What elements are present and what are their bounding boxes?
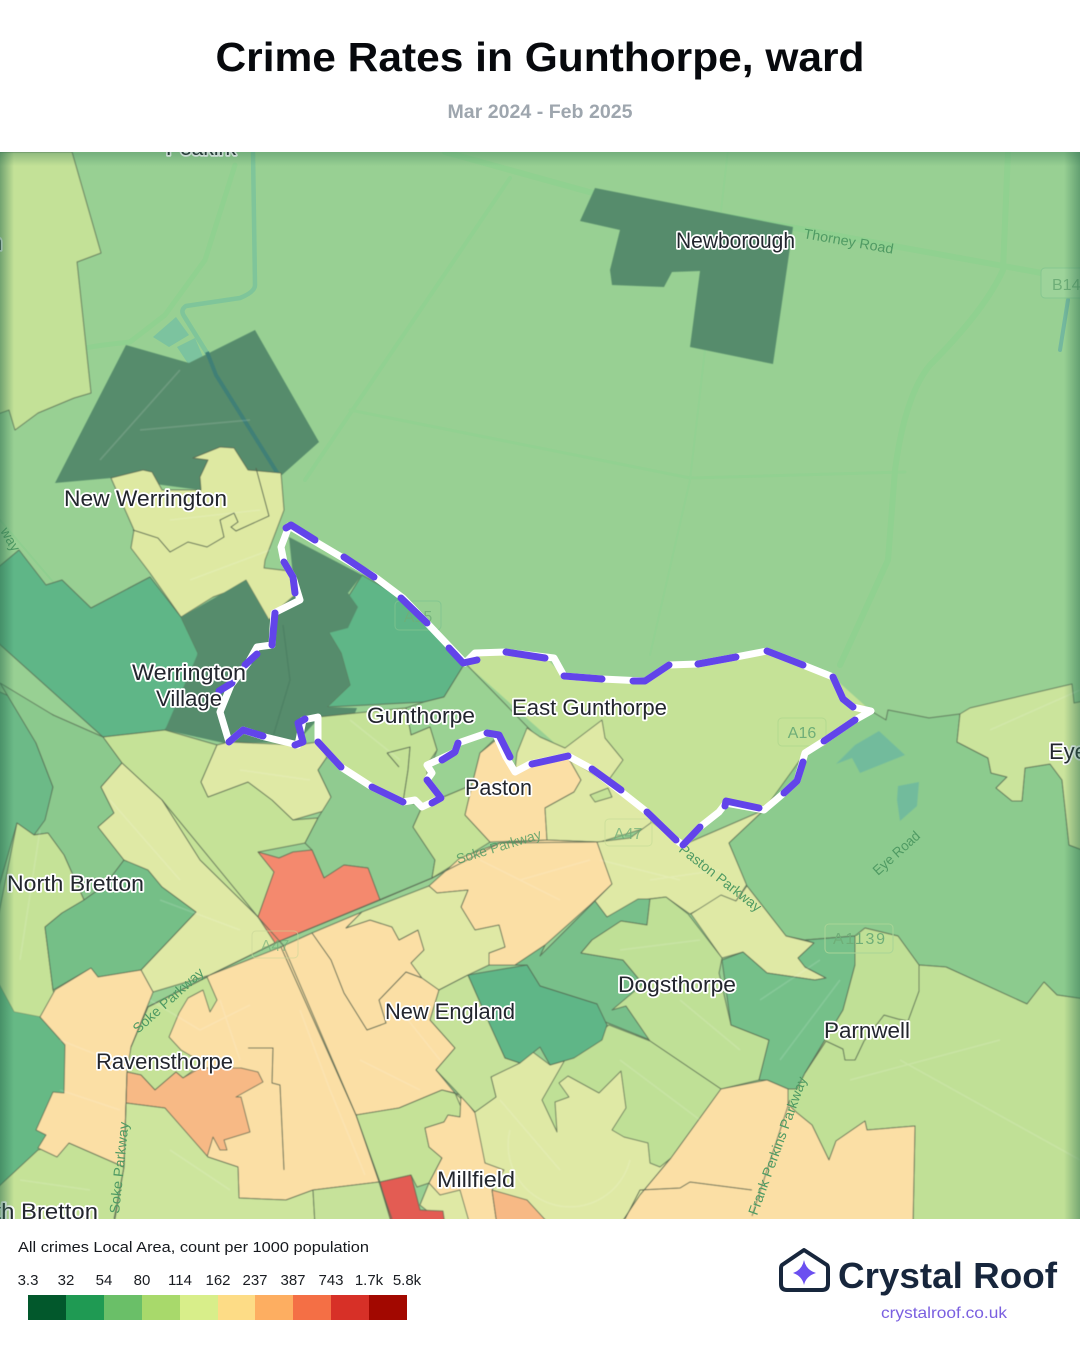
ward: Gunthorpe patch green — [406, 666, 532, 758]
ward: Parnwell light — [805, 928, 919, 1073]
ward: small green patch — [590, 788, 612, 802]
shield: A16 — [778, 718, 826, 746]
ward: green west corridor — [0, 683, 124, 900]
label: North Bretton: North Bretton — [7, 871, 144, 896]
canal over dark ward — [207, 352, 278, 474]
Crystal Roof logo — [781, 1250, 1058, 1322]
road label: Soke Parkway east: Soke Parkway — [454, 826, 543, 867]
shield: A15: A15 — [404, 609, 432, 626]
ward: North Bretton green — [45, 860, 196, 990]
map: ponds — [153, 317, 203, 365]
ward: Soke strip — [127, 977, 217, 1090]
shield: A47 — [605, 819, 652, 846]
ward boundary: Gunthorpe — [219, 525, 871, 845]
ward: pale Parkway north — [595, 810, 764, 917]
ward: corridor green — [103, 730, 318, 917]
ward: Peterborough pale band — [691, 886, 826, 980]
legend scale labels: 743 — [318, 1272, 344, 1289]
title: Crime Rates in Gunthorpe, ward — [216, 34, 864, 80]
ward: Ravensthorpe central peach — [169, 946, 379, 1200]
ward: Paston light lower — [413, 785, 490, 878]
label: New Werrington: New Werrington — [64, 486, 227, 511]
ward: pale New England north — [346, 886, 505, 990]
ward: West teal — [0, 550, 198, 737]
ward: North Bretton — [0, 823, 84, 1017]
shield: A47: A47 — [614, 826, 642, 843]
shield: A16: A16 — [788, 725, 816, 742]
ward: Newborough dark — [580, 188, 793, 364]
subtitle: date range: Mar 2024 - Feb 2025 — [448, 102, 633, 123]
ward: green south of Gunthorpe — [305, 757, 435, 900]
legend scale labels — [18, 1272, 422, 1289]
boundary: white outline — [220, 526, 871, 845]
legend scale labels: 114 — [168, 1272, 192, 1289]
shield: A1139 — [825, 924, 893, 953]
ward: New Werrington dark — [55, 330, 319, 490]
ward: Dogsthorpe main — [581, 897, 769, 1089]
legend — [18, 1239, 422, 1320]
ward: South-east peach — [620, 1080, 915, 1225]
legend scale labels: 3.3 — [18, 1272, 38, 1289]
map: rural roads and water — [12, 152, 1070, 665]
ward: pale south centre — [420, 1040, 721, 1225]
legend scale labels: 237 — [242, 1272, 268, 1289]
road label: Soke Parkway west: Soke Parkway — [129, 964, 207, 1036]
label: Gunthorpe: Gunthorpe — [367, 703, 475, 728]
ward: Paston peach — [465, 740, 581, 842]
boundary: purple dashes — [219, 525, 855, 845]
shield: A47 west: A47 — [261, 938, 289, 955]
legend scale labels: 54 — [96, 1272, 112, 1289]
ward: eastern rural green — [729, 710, 1080, 1004]
ward: north-west light area — [0, 152, 101, 430]
ward: Millfield orange — [492, 1190, 550, 1225]
label: clipped place at top edge: Peakirk — [166, 135, 237, 160]
ward: Rail south green — [356, 1090, 461, 1187]
ward: salmon high-crime — [258, 850, 380, 943]
ward: north-left band — [0, 690, 53, 900]
label: Parnwell: Parnwell — [824, 1018, 910, 1043]
label: Ravensthorpe: Ravensthorpe — [96, 1049, 233, 1074]
shield: B14: B14 — [1052, 277, 1080, 294]
label: Millfield: Millfield — [437, 1167, 515, 1192]
ward: New England peach — [281, 912, 455, 1115]
shield: A15 — [395, 601, 441, 630]
legend scale labels: 5.8k — [393, 1272, 422, 1289]
ward: New England teal — [468, 965, 607, 1065]
logo wordmark: Crystal Roof — [838, 1255, 1058, 1296]
ward: Parnwell band — [722, 936, 855, 1089]
ward: Millfield peach — [425, 1095, 504, 1225]
ward: pale south of Werrington — [201, 742, 331, 820]
ward: East Gunthorpe — [465, 651, 871, 845]
icon: house with star — [781, 1250, 828, 1290]
road label: Frank Perkins Parkway: Frank Perkins Parkway — [745, 1074, 810, 1217]
road label: Paston Parkway: Paston Parkway — [676, 841, 765, 915]
ward: Dogsthorpe teal band — [515, 899, 650, 1040]
ward: SW lower light — [114, 1103, 315, 1225]
map: rail and parkway lines — [114, 800, 790, 1219]
shield: B14 — [1041, 268, 1080, 298]
ward: Dogsthorpe south — [542, 1025, 721, 1167]
legend scale labels: 32 — [58, 1272, 74, 1289]
ward: Soke Parkway peach — [429, 840, 612, 965]
legend scale labels: 1.7k — [355, 1272, 384, 1289]
ward: Gunthorpe south-west — [318, 708, 441, 807]
legend scale labels: 80 — [134, 1272, 150, 1289]
shield: A1139: A1139 — [833, 931, 885, 948]
ward: wedge south — [313, 1182, 392, 1225]
label: Dogsthorpe: Dogsthorpe — [618, 972, 736, 997]
road label: Eye Road: Eye Road — [869, 828, 923, 878]
ward: South-east rural — [788, 965, 1080, 1225]
ward: pale rail corridor — [98, 763, 275, 992]
legend scale labels: 162 — [205, 1272, 231, 1289]
shield: A47 west — [252, 931, 298, 958]
label: Werrington: Werrington — [132, 660, 246, 685]
map: wards — [0, 152, 1080, 1225]
map: faint residential streets — [20, 370, 1080, 1207]
legend scale labels: 387 — [280, 1272, 306, 1289]
ward: East Gunthorpe pale wedge — [515, 720, 623, 785]
label: Newborough: Newborough — [676, 228, 795, 253]
ward: New Werrington light — [111, 447, 295, 620]
ward: SW green — [0, 1143, 124, 1225]
legend colour bar — [28, 1295, 407, 1320]
website url: crystalroof.co.uk — [881, 1305, 1008, 1322]
legend title: All crimes Local Area, count per 1000 population — [18, 1239, 369, 1256]
ward: far-west green — [0, 977, 65, 1190]
ward: Red high-crime — [380, 1175, 445, 1225]
ward: Eye light — [957, 684, 1080, 851]
label: Village: Village — [156, 686, 222, 711]
label: East Gunthorpe: East Gunthorpe — [512, 695, 667, 720]
road label: Soke Parkway south: Soke Parkway — [106, 1121, 132, 1214]
map: edge vignette — [0, 152, 1080, 1219]
ward: Werrington dark — [165, 537, 362, 743]
ward: Gunthorpe teal — [327, 575, 465, 707]
road label: Thorney Road: Thorney Road — [802, 225, 895, 257]
ward: Ravensthorpe orange — [126, 1068, 263, 1157]
label: Paston: Paston — [465, 775, 532, 800]
ward: New England light — [430, 975, 520, 1112]
label: New England: New England — [385, 999, 515, 1024]
ward: pale by A47 — [545, 757, 652, 842]
ward: Ravensthorpe west peach — [36, 968, 153, 1167]
map: road labels and shields — [0, 225, 1080, 1217]
map: lakes — [836, 731, 919, 821]
